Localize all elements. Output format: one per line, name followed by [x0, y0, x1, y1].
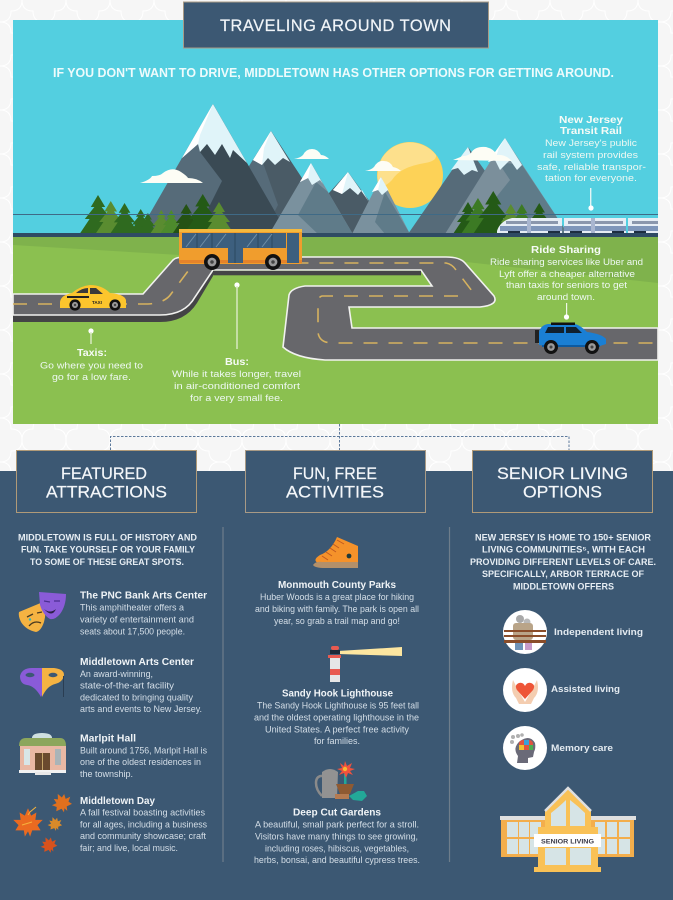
intro text — [18, 532, 197, 567]
trees right — [453, 191, 554, 234]
callout: taxis: Go where you need to — [40, 360, 143, 372]
icon: hiking boot — [313, 537, 358, 568]
item: Marlpit Hall: Built around 1756, Marlpit Hall is — [80, 746, 207, 756]
callout: ride sharing — [490, 244, 643, 320]
callout: rail: Transit Rail — [560, 125, 622, 137]
item: Marlpit Hall — [80, 734, 207, 779]
heading: featured attractions — [16, 450, 196, 512]
panel: senior living options — [470, 450, 656, 872]
callout: bus: Bus: — [225, 356, 249, 368]
item: PNC Bank Arts Center — [80, 590, 207, 636]
heading: featured attractions: ATTRACTIONS — [46, 482, 167, 502]
callout: bus — [172, 282, 301, 404]
label: memory care: Memory care — [551, 742, 613, 753]
item: Monmouth County Parks: year, so grab a trail map and go! — [274, 616, 400, 626]
callout: ride sharing: around town. — [537, 292, 595, 303]
subtitle: IF YOU DON'T WANT TO DRIVE, MIDDLETOWN HAS OTHER OPTIONS FOR GETTING AROUND. — [53, 66, 614, 80]
item: Deep Cut Gardens: Deep Cut Gardens — [293, 808, 382, 818]
icon: garden tools — [316, 761, 367, 801]
icon: bus — [179, 229, 302, 270]
item: Marlpit Hall: Marlpit Hall — [80, 734, 136, 744]
heading: senior living options — [472, 450, 652, 512]
intro text: MIDDLETOWN IS FULL OF HISTORY AND — [18, 532, 197, 542]
heading: fun free activities — [246, 450, 426, 512]
item: Sandy Hook Lighthouse: The Sandy Hook Lighthouse is 95 feet tall — [257, 700, 419, 710]
icon: head with colorful brain — [503, 726, 547, 770]
callout: bus: While it takes longer, travel — [172, 369, 301, 380]
icon: lighthouse — [328, 646, 402, 682]
item: Deep Cut Gardens: Visitors have many things to see growing, — [255, 832, 418, 842]
icon: senior living building: SENIOR LIVING — [541, 838, 594, 846]
sky — [13, 20, 658, 236]
item: Middletown Day: for all ages, including a business — [80, 820, 207, 830]
road — [13, 257, 658, 360]
title banner — [184, 2, 488, 48]
intro text: PROVIDING DIFFERENT LEVELS OF CARE. — [470, 557, 656, 567]
item: Middletown Arts Center: An award-winning, — [80, 669, 153, 679]
panel: traveling scene — [13, 20, 658, 424]
heading: fun free activities: ACTIVITIES — [286, 482, 384, 502]
callout: rail — [537, 114, 646, 211]
intro text: FUN. TAKE YOURSELF OR YOUR FAMILY — [21, 544, 195, 554]
icon: carnival mask — [20, 668, 64, 697]
heading: fun free activities: FUN, FREE — [293, 464, 377, 483]
panel: fun free activities — [246, 450, 426, 865]
intro text: SPECIFICALLY, ARBOR TERRACE OF — [482, 569, 645, 579]
icon: autumn leaves — [13, 790, 75, 856]
item: Sandy Hook Lighthouse: Sandy Hook Lighthouse — [282, 688, 394, 700]
callout: ride sharing: Ride Sharing — [531, 244, 601, 256]
icon: train — [497, 218, 658, 234]
callout: taxis — [40, 328, 143, 383]
column dividers — [223, 527, 450, 862]
item: Middletown Arts Center: Middletown Arts Center — [80, 657, 194, 668]
item: Sandy Hook Lighthouse: and the oldest operating lighthouse in the — [254, 712, 419, 722]
heading: senior living options: SENIOR LIVING — [497, 464, 628, 483]
callout: ride sharing: than taxis for seniors to get — [506, 280, 627, 291]
icon: sun — [377, 142, 443, 208]
item: Middletown Day — [80, 796, 207, 853]
item: Monmouth County Parks: Monmouth County Parks — [278, 580, 397, 591]
item: Middletown Arts Center: dedicated to bringing quality — [80, 692, 193, 702]
panel: featured attractions — [13, 450, 207, 856]
icon: hands and heart — [503, 668, 547, 712]
item: Middletown Arts Center — [80, 657, 202, 714]
item: Deep Cut Gardens: including roses, hibiscus, vegetables, — [265, 844, 409, 854]
item: Monmouth County Parks: and biking with family. The park is open all — [255, 604, 419, 614]
panel: lower navy section — [0, 471, 673, 900]
item: Middletown Day: Middletown Day — [80, 796, 156, 807]
intro text: MIDDLETOWN OFFERS — [513, 582, 614, 592]
heading: featured attractions: FEATURED — [61, 464, 147, 483]
callout: rail: safe, reliable transpor- — [537, 162, 646, 173]
item: Marlpit Hall: one of the oldest residences in — [80, 757, 201, 767]
callout: rail: New Jersey — [559, 114, 623, 126]
icon: taxi — [60, 285, 126, 311]
rail wire — [13, 214, 658, 215]
item: PNC Bank Arts Center: This amphitheater offers a — [80, 602, 185, 612]
intro text: NEW JERSEY IS HOME TO 150+ SENIOR — [475, 532, 652, 542]
callout: rail: New Jersey's public — [545, 138, 637, 149]
callout: rail: rail system provides — [543, 150, 638, 161]
item: Middletown Arts Center: arts and events to New Jersey. — [80, 704, 202, 714]
callout: ride sharing: Lyft offer a cheaper alternative — [499, 269, 635, 280]
label: assisted living: Assisted living — [551, 683, 620, 694]
ground — [13, 233, 658, 424]
item: Marlpit Hall: the township. — [80, 769, 133, 779]
item: Deep Cut Gardens — [254, 808, 420, 865]
label: independent living: Independent living — [554, 626, 643, 637]
item: Monmouth County Parks — [255, 580, 419, 626]
callout: bus: for a very small fee. — [190, 393, 283, 404]
trees left — [80, 194, 234, 235]
item: Middletown Day: A fall festival boasting activities — [80, 808, 205, 818]
callout: bus: in air-conditioned comfort — [174, 381, 300, 392]
item: Sandy Hook Lighthouse — [254, 688, 419, 746]
item: Deep Cut Gardens: herbs, bonsai, and beautiful cypress trees. — [254, 855, 420, 865]
icon: blue car — [535, 322, 606, 354]
icon: senior living building — [500, 788, 636, 872]
item: Middletown Day: fair; and live, local music. — [80, 843, 178, 853]
item: Middletown Day: and community showcase; craft — [80, 831, 206, 841]
clouds — [140, 147, 512, 183]
dashed connector — [110, 424, 569, 450]
callout: ride sharing: Ride sharing services like Uber and — [490, 257, 643, 268]
icon: Marlpit Hall building — [19, 733, 66, 775]
intro text: LIVING COMMUNITIES⁵, WITH EACH — [482, 544, 645, 554]
icon: couple on bench — [503, 610, 547, 654]
item: Middletown Arts Center: state-of-the-art facility — [80, 680, 174, 690]
item: Deep Cut Gardens: A beautiful, small park perfect for a stroll. — [255, 820, 419, 830]
heading: senior living options: OPTIONS — [523, 482, 602, 502]
icon: taxi: TAXI — [92, 300, 102, 305]
callout: taxis: Taxis: — [77, 347, 107, 359]
intro text — [470, 532, 656, 592]
callout: taxis: go for a low fare. — [52, 372, 131, 383]
icon: theater masks — [19, 592, 66, 632]
item: Sandy Hook Lighthouse: United States. A perfect free activity — [265, 724, 409, 734]
item: PNC Bank Arts Center: seats about 17,500 people. — [80, 626, 185, 636]
intro text: TO SOME OF THESE GREAT SPOTS. — [30, 557, 184, 567]
item: Sandy Hook Lighthouse: for families. — [314, 736, 360, 746]
callout: rail: tation for everyone. — [545, 173, 637, 184]
item: PNC Bank Arts Center: The PNC Bank Arts Center — [80, 590, 207, 602]
mountains — [137, 104, 568, 236]
item: PNC Bank Arts Center: variety of entertainment and — [80, 614, 194, 624]
item: Monmouth County Parks: Huber Woods is a great place for hiking — [260, 592, 414, 602]
title banner: TRAVELING AROUND TOWN — [220, 17, 451, 35]
